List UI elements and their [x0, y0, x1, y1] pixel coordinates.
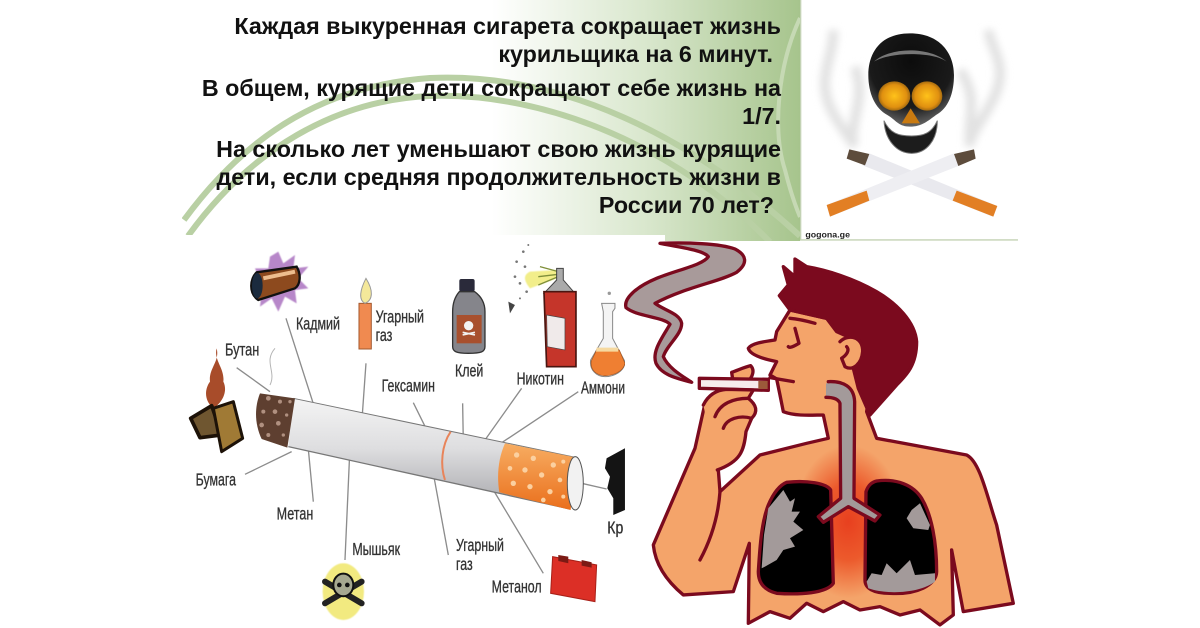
icon: candle	[359, 278, 371, 349]
heading: question text: курильщика на 6 минут.	[498, 41, 773, 67]
diagram labels: Метанол	[492, 576, 542, 596]
heading: question text	[202, 13, 782, 218]
diagram labels: газ	[456, 554, 473, 574]
heading: question text: На сколько лет уменьшают свою жизнь курящие	[216, 136, 781, 162]
hand	[703, 389, 756, 470]
inner arm line	[700, 492, 720, 560]
heading: question text: Каждая выкуренная сигарета сокращает жизнь	[234, 13, 781, 39]
skull	[868, 33, 954, 153]
heading: question text: дети, если средняя продолжительность жизни в	[216, 164, 781, 190]
pointer lines	[237, 318, 607, 573]
icon: black object at edge	[605, 448, 625, 515]
diagram labels: Бумага	[196, 470, 236, 490]
icon: fuel can	[551, 555, 597, 602]
finger lines	[715, 398, 752, 428]
picture: smoker with blackened lungs	[626, 243, 1013, 625]
lung: right	[865, 480, 937, 593]
heading: question text: В общем, курящие дети сокращают себе жизнь на	[202, 75, 782, 101]
diagram labels: Бутан	[225, 340, 259, 360]
icon: flask	[590, 292, 625, 377]
picture: cigarette composition diagram	[191, 244, 625, 620]
icon: poison skull	[323, 563, 364, 620]
body silhouette	[653, 310, 1013, 625]
watermark: gogona.ge	[805, 230, 851, 239]
hair	[779, 259, 917, 415]
diagram labels: Гексамин	[382, 376, 435, 396]
chest glow	[793, 445, 903, 598]
cigarette	[256, 393, 583, 510]
icon: spray can	[508, 244, 576, 367]
diagram labels: Угарный	[376, 306, 424, 326]
left cigarette	[847, 149, 997, 217]
diagram labels: Угарный	[456, 535, 504, 555]
right cigarette	[827, 149, 976, 217]
diagram labels: Мышьяк	[352, 539, 400, 559]
cigarette	[699, 378, 768, 390]
icon: lighter	[191, 348, 243, 452]
diagram labels: Кадмий	[296, 313, 340, 333]
diagram labels: Кр	[607, 517, 623, 537]
diagram labels: газ	[376, 325, 392, 345]
heading: question text: России 70 лет?	[599, 192, 774, 218]
diagram labels: Клей	[455, 361, 483, 381]
ear	[840, 337, 863, 368]
eye and brow	[770, 318, 815, 382]
icon: glue bottle	[453, 279, 485, 353]
lung: left	[758, 482, 833, 594]
picture: skull with crossed cigarettes	[800, 0, 1018, 241]
smoke	[825, 30, 1000, 147]
heading: question text: 1/7.	[742, 103, 781, 129]
diagram labels: Аммони	[581, 377, 625, 397]
trachea	[818, 382, 880, 522]
icon: cadmium battery	[251, 252, 308, 312]
lung: left damage	[762, 490, 803, 568]
lung: right damage	[867, 503, 935, 592]
diagram labels: Никотин	[517, 368, 564, 388]
diagram labels	[196, 306, 625, 596]
diagram labels: Метан	[277, 503, 313, 523]
smoke plume	[626, 243, 745, 382]
panel: green text background	[182, 0, 801, 242]
finger above cigarette	[732, 366, 753, 383]
